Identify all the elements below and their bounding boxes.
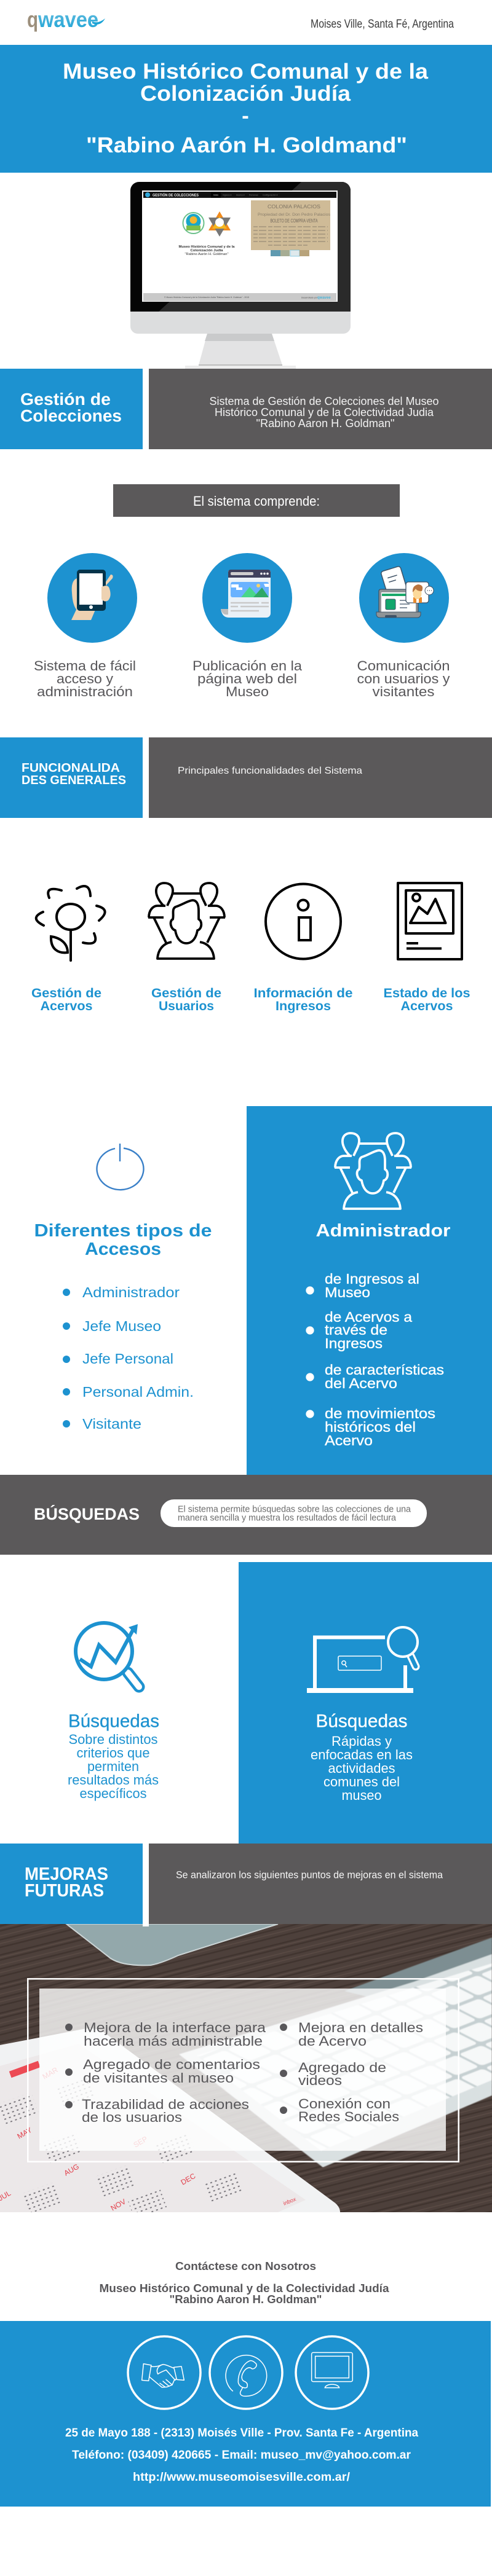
icon: laptop, document and person bbox=[359, 553, 449, 643]
screen document photo: BOLETO DE COMPRA-VENTA bbox=[271, 218, 318, 224]
access list: Jefe Museo bbox=[82, 1318, 161, 1334]
contact heading: Contáctese con Nosotros bbox=[175, 2260, 316, 2272]
screen nav bar: Acervo ▾ bbox=[236, 194, 245, 197]
screen footer: © Museo Histórico Comunal y de la Colonización Judía "Rabino Aarón H. Goldman" - 2015 bbox=[164, 296, 249, 299]
label bbox=[357, 658, 450, 699]
admin list: de Ingresos al bbox=[325, 1271, 419, 1287]
monitor screen bbox=[142, 190, 338, 302]
monitor stand bbox=[185, 334, 296, 369]
label: Estado de los Acervos bbox=[384, 986, 470, 1013]
admin list: de Acervos a bbox=[325, 1309, 412, 1325]
icon: users white bbox=[335, 1133, 411, 1209]
heading: Búsquedas bbox=[68, 1711, 159, 1732]
monitor bezel bbox=[130, 182, 351, 312]
improvements column 2: Conexión con bbox=[298, 2096, 391, 2111]
calendar tablet bbox=[0, 2028, 340, 2220]
location text: Moises Ville, Santa Fé, Argentina bbox=[311, 17, 454, 31]
admin list: Acervo bbox=[325, 1432, 373, 1448]
band description panel: Principales funcionalidades del Sistema bbox=[178, 766, 362, 776]
screen document photo bbox=[251, 200, 330, 256]
description: específicos bbox=[80, 1786, 146, 1801]
monitor chin bbox=[130, 312, 351, 334]
label: Información de Ingresos: Ingresos bbox=[276, 999, 331, 1013]
improvements column 2 bbox=[280, 2020, 423, 2124]
screen nav bar: Inicio bbox=[213, 194, 218, 197]
icon: information bbox=[266, 884, 341, 959]
improvements column 1: de visitantes al museo bbox=[83, 2070, 234, 2086]
icon: flower bbox=[36, 886, 105, 960]
screen caption: Colonización Judía bbox=[191, 249, 223, 253]
screen nav bar bbox=[143, 192, 336, 198]
calendar tablet: inbox bbox=[282, 2196, 297, 2207]
feature: comunicación bbox=[357, 553, 450, 699]
band description panel bbox=[149, 369, 492, 449]
access list: Visitante bbox=[82, 1416, 141, 1432]
section band: Mejoras futuras bbox=[0, 1844, 492, 1924]
feature: fácil acceso bbox=[34, 553, 137, 699]
band heading panel: DES GENERALES bbox=[22, 774, 126, 787]
heading bar: El sistema comprende bbox=[113, 484, 400, 517]
pill description: El sistema permite búsquedas sobre las colecciones de una bbox=[178, 1504, 411, 1514]
contact heading: "Rabino Aaron H. Goldman" bbox=[170, 2293, 322, 2306]
improvements column 2: Mejora en detalles bbox=[298, 2020, 423, 2035]
band heading panel: FUTURAS bbox=[25, 1881, 104, 1901]
band heading panel bbox=[0, 369, 143, 449]
label: Información de Ingresos bbox=[253, 986, 353, 1013]
improvements column 2: videos bbox=[298, 2073, 342, 2088]
admin list: de movimientos bbox=[325, 1405, 435, 1421]
title text bbox=[63, 60, 429, 157]
description: resultados más bbox=[68, 1772, 159, 1788]
label: administración bbox=[37, 684, 133, 699]
description: museo bbox=[342, 1788, 381, 1803]
logo: qwavee: q bbox=[27, 7, 38, 32]
label bbox=[192, 658, 303, 699]
screen footer: qwavee bbox=[317, 296, 331, 300]
icon: phone in hand bbox=[47, 553, 137, 643]
screen footer: Desarrollado por bbox=[301, 296, 318, 299]
section band: Funcionalidades generales bbox=[0, 737, 492, 818]
icon: telephone bbox=[210, 2336, 282, 2409]
access list: Personal Admin. bbox=[82, 1384, 194, 1400]
description: Rápidas y bbox=[331, 1734, 392, 1749]
description: enfocadas en las bbox=[311, 1747, 413, 1762]
panel: tipos de acceso bbox=[34, 1144, 212, 1432]
access list: Administrador bbox=[82, 1284, 180, 1300]
icon: users bbox=[148, 883, 225, 959]
band heading panel: Gestión de bbox=[20, 390, 111, 409]
improvements column 1: de los usuarios bbox=[82, 2110, 182, 2125]
improvements column 2: Redes Sociales bbox=[298, 2109, 399, 2124]
heading: Diferentes tipos de Accesos: Accesos bbox=[85, 1239, 161, 1259]
pill description bbox=[161, 1499, 427, 1527]
section band: Gestión de Colecciones bbox=[0, 369, 492, 449]
calendar tablet: MAY bbox=[16, 2126, 33, 2141]
improvements column 1: Trazabilidad de acciones bbox=[82, 2097, 249, 2112]
label bbox=[34, 658, 136, 699]
calendar tablet: NOV bbox=[109, 2197, 127, 2213]
calendar tablet: DEC bbox=[180, 2172, 197, 2187]
label: Gestión de Acervos: Gestión de bbox=[31, 986, 101, 1000]
contact details: 25 de Mayo 188 - (2313) Moisés Ville - Prov. Santa Fe - Argentina bbox=[65, 2426, 418, 2440]
contact heading: Museo Histórico Comunal y de la Colectividad Judía bbox=[100, 2282, 390, 2295]
admin list: Ingresos bbox=[325, 1335, 383, 1351]
label: Sistema de fácil bbox=[34, 658, 136, 673]
label: con usuarios y bbox=[357, 671, 450, 686]
description: Sobre distintos bbox=[69, 1732, 157, 1747]
screen caption: Museo Histórico Comunal y de la bbox=[178, 245, 235, 249]
improvements column 2: de Acervo bbox=[298, 2033, 367, 2049]
screen document photo: Propiedad del Dr. Don Pedro Palacios bbox=[258, 213, 330, 217]
band description panel bbox=[149, 1844, 492, 1924]
icon: picture document bbox=[398, 883, 462, 959]
band heading panel: MEJORAS bbox=[25, 1864, 108, 1884]
label: visitantes bbox=[373, 684, 434, 699]
contact heading bbox=[100, 2260, 390, 2306]
contact details: http://www.museomoisesville.com.ar/ bbox=[133, 2470, 351, 2484]
band description panel: Histórico Comunal y de la Colectividad Judia bbox=[215, 406, 434, 418]
description bbox=[311, 1734, 413, 1803]
title text: - bbox=[242, 104, 249, 128]
label: Estado de los Acervos: Acervos bbox=[401, 999, 453, 1013]
admin list: Museo bbox=[325, 1284, 370, 1300]
title text: "Rabino Aarón H. Goldmand" bbox=[86, 133, 407, 157]
footer panel bbox=[0, 2321, 491, 2507]
icon: computer monitor bbox=[296, 2336, 368, 2409]
trackpad bbox=[66, 1924, 278, 1965]
pill description: manera sencilla y muestra los resultados de fácil lectura bbox=[178, 1513, 397, 1523]
screen caption bbox=[178, 245, 235, 256]
band description panel: Sistema de Gestión de Colecciones del Museo bbox=[209, 395, 439, 407]
label: Museo bbox=[226, 684, 269, 699]
photo: desk with keyboard and calendar bbox=[0, 1924, 492, 2220]
improvements column 1: Mejora de la interface para bbox=[84, 2020, 266, 2035]
heading: Diferentes tipos de Accesos bbox=[34, 1221, 212, 1259]
band heading panel bbox=[0, 1844, 143, 1924]
screen logos bbox=[183, 211, 231, 237]
description bbox=[68, 1732, 159, 1801]
monitor mockup bbox=[130, 182, 351, 369]
contact details: Teléfono: (03409) 420665 - Email: museo_mv@yahoo.com.ar bbox=[72, 2448, 411, 2462]
contact details bbox=[65, 2426, 418, 2484]
label: Gestión de Usuarios bbox=[151, 986, 221, 1013]
white notch between bands bbox=[143, 1844, 149, 1926]
admin list bbox=[306, 1271, 444, 1448]
band heading: BÚSQUEDAS bbox=[34, 1504, 140, 1523]
label: Gestión de Acervos: Acervos bbox=[41, 999, 92, 1013]
description: permiten bbox=[87, 1759, 139, 1774]
description: actividades bbox=[328, 1761, 395, 1776]
section band: Búsquedas bbox=[0, 1475, 492, 1555]
translucent panel bbox=[39, 1989, 446, 2151]
screen nav bar: GESTIÓN DE COLECCIONES bbox=[153, 193, 199, 198]
access list bbox=[63, 1284, 194, 1432]
icon: power bbox=[97, 1144, 143, 1190]
label: Comunicación bbox=[357, 658, 450, 673]
admin list: del Acervo bbox=[325, 1375, 397, 1391]
improvements column 2: Agregado de bbox=[298, 2060, 386, 2075]
label: Publicación en la bbox=[192, 658, 303, 673]
band description panel bbox=[149, 737, 492, 818]
improvements column 1: Agregado de comentarios bbox=[83, 2057, 260, 2072]
title text: Museo Histórico Comunal y de la bbox=[63, 60, 429, 84]
label: Gestión de Usuarios: Usuarios bbox=[159, 999, 214, 1013]
title text: Colonización Judía bbox=[140, 82, 351, 106]
band description panel: Se analizaron los siguientes puntos de mejoras en el sistema bbox=[176, 1869, 443, 1880]
panel: administrador bbox=[247, 1106, 492, 1475]
admin list: de características bbox=[325, 1362, 444, 1378]
screen footer bbox=[143, 293, 336, 301]
calendar tablet: MAR bbox=[41, 2065, 60, 2081]
heading: Diferentes tipos de Accesos: Diferentes tipos de bbox=[34, 1221, 212, 1241]
band heading panel: Colecciones bbox=[20, 406, 122, 425]
band description panel: "Rabino Aaron H. Goldman" bbox=[256, 417, 395, 430]
label: página web del bbox=[197, 671, 297, 686]
screen nav bar: Ingreso ▾ bbox=[223, 194, 232, 197]
feature: publicación web bbox=[192, 553, 303, 699]
improvements column 1 bbox=[65, 2020, 266, 2125]
label: Gestión de Acervos bbox=[31, 986, 101, 1013]
band heading panel: FUNCIONALIDA bbox=[22, 761, 120, 775]
label: Gestión de Usuarios: Gestión de bbox=[151, 986, 221, 1000]
description: comunes del bbox=[323, 1774, 400, 1789]
calendar tablet: AUG bbox=[63, 2162, 81, 2178]
panel: búsquedas rápidas bbox=[239, 1562, 492, 1844]
admin list: históricos del bbox=[325, 1419, 416, 1435]
description: criterios que bbox=[76, 1745, 150, 1761]
icon: web page scroll bbox=[202, 553, 292, 643]
label: Información de Ingresos: Información de bbox=[253, 986, 353, 1000]
label: acceso y bbox=[57, 671, 113, 686]
screen nav bar: Personas bbox=[249, 194, 258, 197]
keyboard bbox=[179, 1938, 492, 2167]
improvements column 1: hacerla más administrable bbox=[84, 2033, 263, 2049]
screen nav bar: Configuración ▾ bbox=[263, 194, 278, 197]
icon: handshake bbox=[128, 2336, 200, 2409]
panel: búsquedas por criterios bbox=[68, 1623, 159, 1801]
icon: monitor with search bbox=[307, 1627, 418, 1693]
title banner bbox=[0, 45, 492, 173]
admin list: través de bbox=[325, 1322, 387, 1338]
band heading panel bbox=[0, 737, 143, 818]
label: Estado de los Acervos: Estado de los bbox=[384, 986, 470, 1000]
screen caption: "Rabino Aarón H. Goldman" bbox=[184, 253, 229, 256]
access list: Jefe Personal bbox=[82, 1351, 173, 1367]
header: logo and location bbox=[27, 7, 454, 32]
white frame bbox=[28, 1979, 459, 2162]
screen document photo: COLONIA PALACIOS bbox=[268, 204, 320, 210]
icon: magnifier with chart arrow bbox=[76, 1623, 139, 1687]
overlay panel: list of improvements bbox=[28, 1979, 459, 2162]
heading: Búsquedas bbox=[316, 1711, 407, 1732]
calendar tablet: SEP bbox=[132, 2134, 149, 2150]
heading bar: El sistema comprende: El sistema comprende: bbox=[193, 493, 320, 509]
heading: Administrador: Administrador bbox=[316, 1221, 450, 1241]
logo: qwavee: wavee bbox=[38, 7, 98, 32]
